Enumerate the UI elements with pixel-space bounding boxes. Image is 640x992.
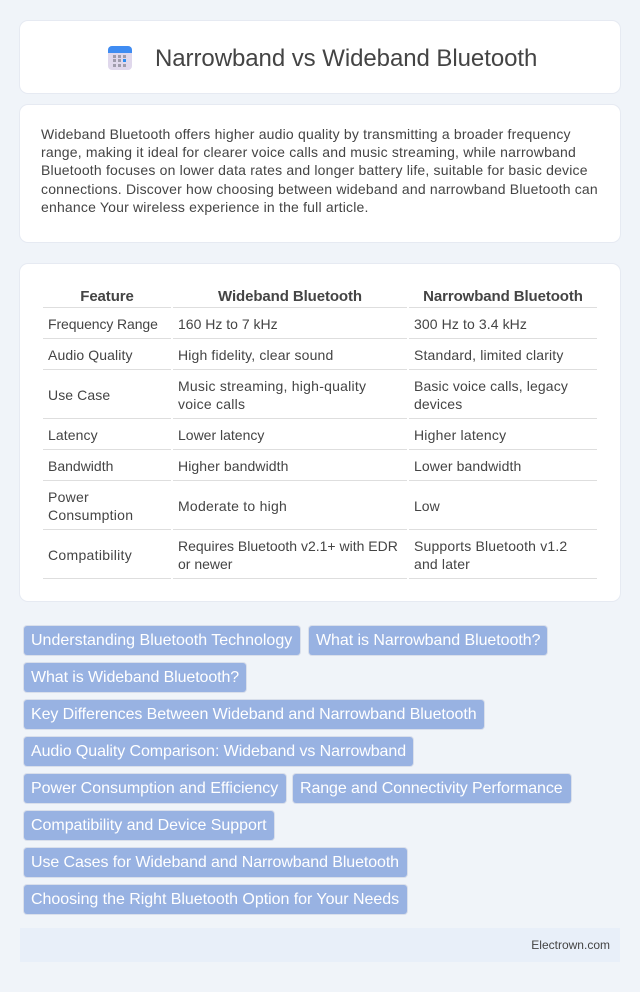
title: Narrowband vs Wideband Bluetooth bbox=[155, 45, 537, 72]
row: power consumption: Power bbox=[48, 489, 89, 505]
row: audio quality bbox=[48, 347, 564, 363]
tag: key differences: Key Differences Between Wideband and Narrowband Bluetooth bbox=[31, 706, 477, 723]
panel: comparison table bbox=[20, 264, 620, 601]
row: compatibility: or newer bbox=[178, 556, 232, 572]
row: power consumption: Low bbox=[414, 498, 440, 514]
text block: summary paragraph bbox=[41, 126, 598, 215]
text block: summary paragraph: range, making it ideal for clearer voice calls and music streaming, while narrowband bbox=[41, 144, 576, 160]
row: latency: Lower latency bbox=[178, 427, 264, 443]
icon: calendar app bbox=[108, 46, 132, 70]
row: latency: Latency bbox=[48, 427, 98, 443]
footer credit: Electrown.com bbox=[531, 938, 610, 952]
tag: use cases bbox=[24, 848, 407, 877]
row: use case: Music streaming, high-quality bbox=[178, 378, 366, 394]
row: frequency range: 160 Hz to 7 kHz bbox=[178, 316, 278, 332]
tag: use cases: Use Cases for Wideband and Narrowband Bluetooth bbox=[31, 854, 399, 871]
row: latency: Higher latency bbox=[414, 427, 506, 443]
row: compatibility: Supports Bluetooth v1.2 bbox=[414, 538, 567, 554]
row: frequency range: Frequency Range bbox=[48, 316, 158, 332]
row: compatibility: and later bbox=[414, 556, 470, 572]
row: use case: voice calls bbox=[178, 396, 245, 412]
row: use case: Basic voice calls, legacy bbox=[414, 378, 568, 394]
row: bandwidth: Higher bandwidth bbox=[178, 458, 289, 474]
text block: summary paragraph: connections. Discover how choosing between wideband and narrowband Bluetooth can bbox=[41, 181, 598, 197]
panel: introduction bbox=[20, 105, 620, 242]
row: use case bbox=[48, 378, 568, 412]
row: audio quality: Audio Quality bbox=[48, 347, 133, 363]
row: power consumption bbox=[48, 489, 440, 523]
tag: power consumption bbox=[24, 774, 286, 803]
row: use case: devices bbox=[414, 396, 462, 412]
tag: understanding bluetooth technology: Understanding Bluetooth Technology bbox=[31, 632, 292, 649]
tag: what is narrowband bbox=[309, 626, 547, 655]
row: compatibility: Requires Bluetooth v2.1+ with EDR bbox=[178, 538, 398, 554]
row: frequency range: 300 Hz to 3.4 kHz bbox=[414, 316, 527, 332]
table header: narrowband: Narrowband Bluetooth bbox=[423, 288, 583, 305]
tag: choosing bbox=[24, 885, 407, 914]
row: frequency range bbox=[48, 316, 527, 332]
panel: topic links bbox=[23, 625, 572, 915]
row: power consumption: Moderate to high bbox=[178, 498, 287, 514]
tag: range and connectivity bbox=[293, 774, 571, 803]
tag: compatibility bbox=[24, 811, 274, 840]
text block: summary paragraph: enhance Your wireless experience in the full article. bbox=[41, 199, 369, 215]
footer bbox=[20, 928, 620, 962]
row: bandwidth: Lower bandwidth bbox=[414, 458, 521, 474]
table header: feature: Feature bbox=[80, 288, 134, 305]
row: use case: Use Case bbox=[48, 387, 110, 403]
tag: what is narrowband: What is Narrowband Bluetooth? bbox=[316, 632, 540, 649]
tag: range and connectivity: Range and Connectivity Performance bbox=[300, 780, 563, 797]
tag: audio quality comparison: Audio Quality Comparison: Wideband vs Narrowband bbox=[31, 743, 406, 760]
tag: understanding bluetooth technology bbox=[24, 626, 300, 655]
tag: what is wideband bbox=[24, 663, 246, 692]
row: power consumption: Consumption bbox=[48, 507, 133, 523]
row: bandwidth bbox=[48, 458, 521, 474]
row: latency bbox=[48, 427, 506, 443]
text block: summary paragraph: Wideband Bluetooth offers higher audio quality by transmitting a broader frequency bbox=[41, 126, 571, 142]
tag: choosing: Choosing the Right Bluetooth Option for Your Needs bbox=[31, 891, 399, 908]
row: audio quality: Standard, limited clarity bbox=[414, 347, 564, 363]
tag: key differences bbox=[24, 700, 484, 729]
row: compatibility bbox=[48, 538, 567, 572]
row: bandwidth: Bandwidth bbox=[48, 458, 113, 474]
table header: wideband: Wideband Bluetooth bbox=[218, 288, 362, 305]
row: compatibility: Compatibility bbox=[48, 547, 132, 563]
panel: title header bbox=[20, 21, 620, 93]
tag: what is wideband: What is Wideband Bluetooth? bbox=[31, 669, 239, 686]
tag: audio quality comparison bbox=[24, 737, 413, 766]
row: audio quality: High fidelity, clear sound bbox=[178, 347, 333, 363]
tag: compatibility: Compatibility and Device Support bbox=[31, 817, 267, 834]
tag: power consumption: Power Consumption and Efficiency bbox=[31, 780, 278, 797]
text block: summary paragraph: Bluetooth focuses on lower data rates and longer battery life, suitable for basic device bbox=[41, 162, 588, 178]
